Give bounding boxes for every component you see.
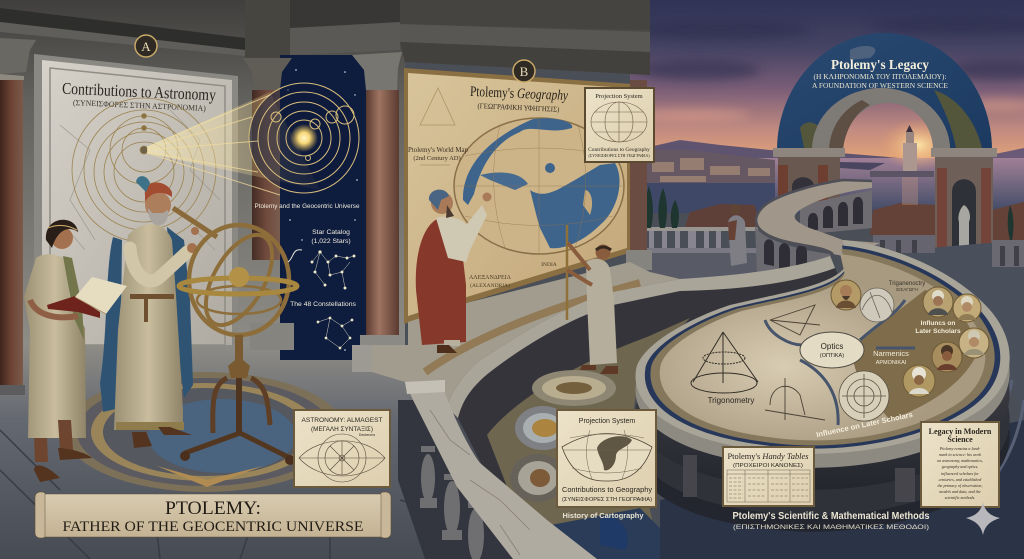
heading: contributions to astronomy: [61, 79, 217, 113]
label: trigonometry greek: ΕΙΣΑΓΩΓΗ: [896, 287, 918, 292]
badge A: [135, 35, 157, 57]
panel: astronomy marble panel: [34, 54, 238, 345]
town roofs left: [685, 204, 760, 227]
floor mosaic medallion: [65, 372, 345, 492]
portrait medallions: [831, 280, 989, 397]
legacy heading: [812, 58, 948, 90]
panel: star field: [280, 55, 366, 360]
legacy body text: centuries, and established: [939, 477, 982, 483]
town roofs right: [870, 203, 935, 235]
card: almagest: Deuterons: [359, 433, 375, 437]
map: world map: [454, 118, 624, 254]
label: india: INDIA: [541, 262, 557, 268]
floor: left stone pavement: [0, 345, 470, 559]
card: projection system upper: [584, 87, 655, 163]
badge B: [513, 60, 535, 82]
card: projection system lower: Contributions to Geography: [562, 487, 653, 494]
column: left: [0, 38, 36, 395]
heading: contributions to astronomy: Contributions to Astronomy: [62, 79, 217, 104]
decorative sketches on map wall: [420, 88, 455, 165]
heading: contributions to astronomy: (ΣΥΝΕΙΣΦΟΡΕΣ ΣΤΗΝ ΑΣΤΡΟΝΟΜΙΑ): [73, 98, 206, 113]
label: the 48 constellations: The 48 Constellations: [290, 301, 356, 308]
right terrace floor and balustrades: [870, 205, 1024, 420]
card: projection system lower: [556, 409, 657, 508]
card: projection system upper: (ΣΥΝΕΙΣΦΟΡΕΣ ΣΤΗ ΓΕΩΓΡΑΦΙΑ): [588, 153, 650, 158]
open book: [47, 277, 127, 318]
card: handy tables: (ΠΡΟΧΕΙΡΟΙ ΚΑΝΟΝΕΣ): [733, 463, 803, 469]
title banner: FATHER OF THE GEOCENTRIC UNIVERSE: [62, 519, 364, 535]
legacy body text: models and data, and the: [939, 489, 981, 495]
portrait: scholar 1: [831, 280, 861, 310]
constellation: the 48 constellations: [317, 317, 353, 349]
label: alexandria: ΑΛΕΞΑΝΔΡΕΙΑ: [469, 275, 512, 281]
road outer edge line: [756, 180, 872, 254]
label: star count: (1,022 Stars): [311, 238, 351, 245]
label: world map: Ptolemy's World Map: [408, 146, 468, 154]
wall: left gallery stone: [0, 0, 650, 345]
card: handy tables: [722, 446, 815, 507]
diagram: glowing geocentric model: [249, 83, 359, 193]
rays: [147, 95, 280, 195]
platform: shaded legacy region: [850, 290, 976, 420]
portrait: scholar 5: [932, 342, 962, 372]
panel: arch globe: [777, 33, 992, 150]
portrait: scholar 6: [903, 365, 935, 397]
diagram: world projection: [562, 430, 652, 481]
diagram: cone: [691, 332, 758, 393]
legacy body text: on astronomy, mathematics,: [937, 458, 983, 464]
legacy body text: [937, 446, 983, 500]
heading: scientific and mathematical methods: Ptolemy's Scientific & Mathematical Methods: [732, 511, 930, 522]
left terrace balustrade: [643, 227, 758, 253]
diagram: sphere medallion: [860, 288, 894, 322]
platform channels: [765, 300, 915, 425]
foreground balustrade: [398, 380, 597, 559]
badge B: B: [520, 64, 529, 79]
tower: left arch pier: [773, 148, 845, 202]
portrait: scholar 3: [953, 294, 981, 322]
figure: Ptolemy with telescope: [100, 176, 217, 448]
diagram: almagest eccentric: [299, 434, 385, 482]
card: projection system upper: Contributions to Geography: [588, 147, 650, 153]
legacy body text: the primacy of observation,: [937, 483, 983, 489]
legacy body text: geography and optics,: [942, 464, 978, 470]
card: projection system lower: (ΣΥΝΕΙΣΦΟΡΕΣ ΣΤΗ ΓΕΩΓΡΑΦΙΑ): [562, 497, 652, 503]
card: projection system upper: Projection System: [595, 93, 643, 100]
legacy body text: influenced scholars for: [941, 471, 979, 476]
icon: four-point sparkle: [966, 502, 1000, 535]
label: later scholars: Later Scholars: [915, 328, 961, 335]
light beam from earth to cosmos: [147, 92, 320, 190]
constellation: star catalog: [311, 250, 355, 289]
curved wall and mosaic pit: [447, 256, 845, 559]
label: trigonometry upper: Triganenoctry: [889, 281, 925, 287]
diagram: projection grid: [591, 102, 647, 142]
heading: ptolemy's geography: [469, 84, 569, 114]
portrait: scholar 2: [923, 287, 953, 317]
floor: outer dark mosaic around drum: [660, 380, 1024, 559]
legacy body text: scientific methods.: [945, 495, 975, 500]
callout: optics: [800, 332, 864, 368]
left terrace floor: [640, 253, 775, 290]
serpentine road surface: [756, 180, 880, 257]
legacy heading: Ptolemy's Legacy: [831, 58, 929, 73]
card: legacy in modern science: Legacy in Modern: [929, 427, 992, 436]
figure: man pointing at map: [416, 190, 492, 353]
cypress trees: [644, 186, 679, 228]
town roofs far right: [992, 202, 1024, 240]
label: trigonometry: Trigonometry: [708, 396, 754, 405]
diagram: triangle sketch: [765, 305, 825, 420]
legacy subtitle: A FOUNDATION OF WESTERN SCIENCE: [812, 83, 948, 90]
diagram: geocentric rings: [72, 98, 216, 242]
label: ptolemy and the geocentric universe: Ptolemy and the Geocentric Universe: [254, 203, 360, 210]
mosaic swirls: [532, 370, 616, 406]
serpentine road support walls: [755, 190, 872, 278]
tower: right arch pier: [931, 148, 997, 263]
card: legacy in modern science: [920, 421, 1000, 508]
title banner: PTOLEMY:: [165, 498, 261, 519]
figure: armillary sphere: [179, 224, 302, 465]
badge A: A: [141, 39, 151, 54]
card: almagest: (ΜΕΓΑΛΗ ΣΥΝΤΑΞΙΣ): [311, 426, 373, 433]
panel: sunset harbour scene: [630, 0, 1024, 240]
card: almagest: ASTRONOMY: ALMAGEST: [302, 417, 383, 424]
stone walkway in front of map: [372, 262, 680, 407]
heading: ptolemy's geography: Ptolemy's Geography: [470, 84, 569, 104]
callout: optics: Optics: [821, 342, 843, 351]
heading: scientific and mathematical methods: [732, 511, 930, 531]
legacy body text: mark in science: his work: [939, 452, 981, 457]
standing figure on terrace: [728, 204, 747, 266]
legacy body text: Ptolemy remains a land-: [939, 446, 981, 451]
lighthouse: [870, 125, 934, 177]
diagram: concentric medallion: [839, 371, 889, 421]
column: right of star field: [352, 52, 408, 372]
table grid: [727, 470, 810, 502]
label: influence on later scholars upper: Influncs on: [921, 320, 955, 327]
label: rim influence on later scholars: Influence on Later Scholars: [815, 410, 914, 439]
column: far right thin pilaster: [626, 80, 652, 270]
label: harmonics greek: ΑΡΜΟΝΙΚΑΙ: [876, 360, 907, 366]
heading: ptolemy's geography: (ΓΕΩΓΡΑΦΙΚΗ ΥΦΗΓΗΣΙΣ): [477, 101, 560, 114]
label: history of cartography: History of Cartography: [562, 511, 644, 520]
title banner: [35, 492, 391, 538]
callout: optics: (ΟΠΤΙΚΑ): [820, 353, 844, 359]
card: handy tables: Ptolemy's Handy Tables: [728, 451, 809, 461]
card: projection system lower: Projection System: [579, 418, 635, 425]
panel: geography map wall: [404, 68, 632, 324]
card: almagest: [293, 409, 391, 488]
platform: stone drum: [636, 254, 1010, 532]
methods greek subtitle: (ΕΠΙΣΤΗΜΟΝΙΚΕΣ ΚΑΙ ΜΑΘΗΜΑΤΙΚΕΣ ΜΕΘΟΔΟΙ): [733, 524, 929, 531]
label: alexandria second line: (ALEXANDRIA): [470, 282, 510, 289]
platform: marble disk with diagrams: [636, 240, 1010, 454]
figure: assistant with star book: [24, 220, 127, 482]
portrait: scholar 4: [959, 328, 989, 358]
statue in niche: [958, 205, 970, 252]
legacy greek subtitle: (Η ΚΛΗΡΟΝΟΜΙΑ ΤΟΥ ΠΤΟΛΕΜΑΙΟΥ):: [814, 74, 947, 81]
label: century: (2nd Century AD): [413, 155, 461, 162]
card: legacy in modern science: Science: [947, 435, 973, 444]
label: harmonics: Narmenics: [873, 349, 909, 358]
figure: assistant holding staff: [567, 225, 618, 374]
column: middle: [243, 58, 294, 350]
label: star catalog: Star Catalog: [312, 229, 350, 236]
